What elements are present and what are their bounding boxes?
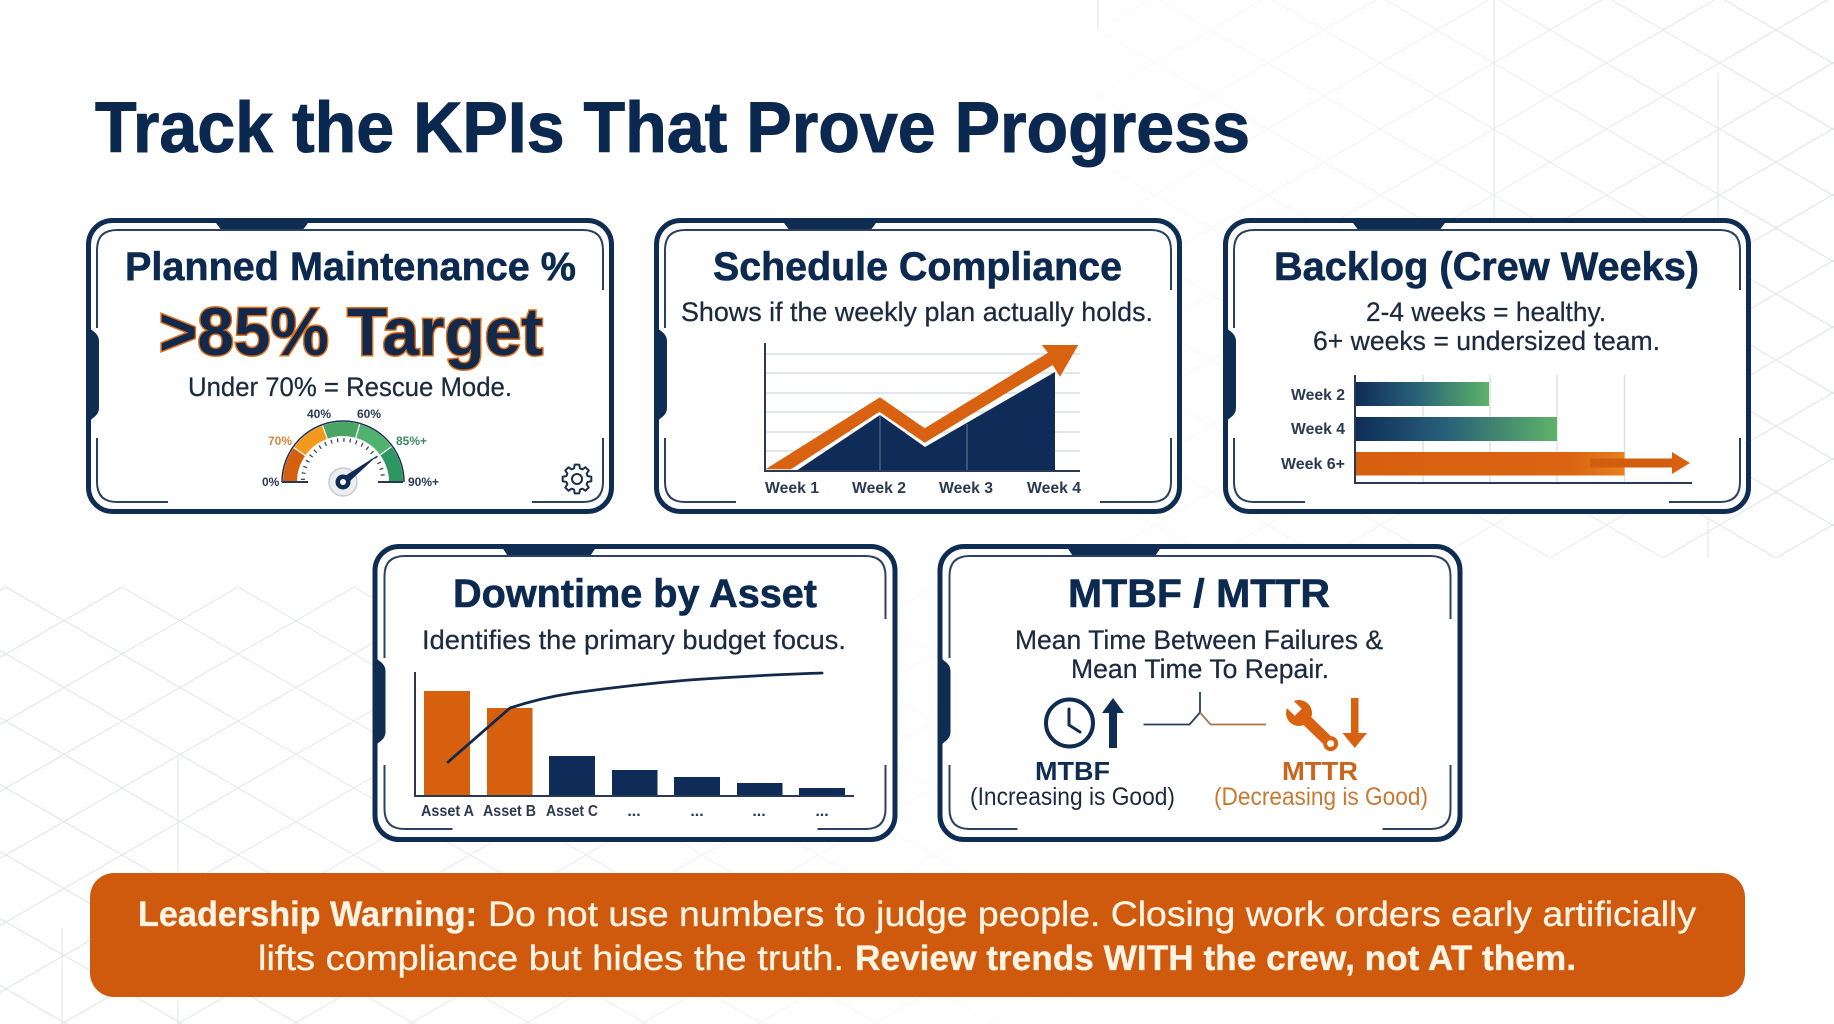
callout: leadership warning: Review trends WITH the crew, not AT them. (855, 939, 1576, 978)
callout: leadership warning: lifts compliance but hides the truth. (258, 939, 844, 978)
connector (1144, 692, 1266, 724)
card frame (374, 545, 895, 840)
gauge (262, 407, 439, 496)
card frame (655, 219, 1180, 512)
panel: backlog (1224, 219, 1748, 512)
cumulative line (448, 673, 822, 762)
gauge: 60% (357, 407, 381, 421)
bar chart (1281, 375, 1692, 483)
description (1313, 297, 1660, 356)
bar chart: Week 4 (1291, 421, 1345, 438)
description: Shows if the weekly plan actually holds. (681, 297, 1153, 327)
description: Identifies the primary budget focus. (422, 625, 846, 655)
description: 2-4 weeks = healthy. (1366, 297, 1606, 327)
icon: gear (563, 465, 591, 493)
gauge: 40% (307, 407, 331, 421)
bar chart: Week 6+ (1281, 456, 1345, 473)
panel: schedule compliance (655, 219, 1180, 512)
description: Under 70% = Rescue Mode. (188, 372, 512, 402)
description (1015, 625, 1383, 684)
description: 6+ weeks = undersized team. (1313, 326, 1660, 356)
callout: leadership warning: Do not use numbers to judge people. Closing work orders early artificially (488, 895, 1697, 934)
area chart: Week 3 (939, 480, 993, 497)
panel: planned maintenance (87, 219, 612, 512)
callout: leadership warning: Leadership Warning: (138, 895, 477, 934)
MTTR label: (Decreasing is Good) (1214, 783, 1428, 811)
heading: Schedule Compliance (713, 245, 1122, 289)
pareto chart: ... (627, 803, 641, 820)
heading: MTBF / MTTR (1068, 572, 1330, 616)
title: Track the KPIs That Prove Progress (95, 89, 1250, 168)
area chart: Week 4 (1027, 480, 1081, 497)
heading: Planned Maintenance % (125, 245, 576, 289)
area chart (765, 343, 1081, 497)
gauge: 85%+ (396, 434, 427, 448)
description: Mean Time To Repair. (1071, 654, 1329, 684)
gauge: 0% (262, 475, 280, 489)
heading: Backlog (Crew Weeks) (1274, 245, 1699, 289)
MTBF label: (Increasing is Good) (970, 783, 1175, 811)
icon: clock (1046, 700, 1093, 746)
MTBF label (970, 756, 1175, 811)
pareto chart: Asset C (546, 803, 598, 820)
arrow (766, 345, 1078, 469)
description: Mean Time Between Failures & (1015, 625, 1383, 655)
icon: up arrow (1102, 698, 1124, 748)
card frame (87, 219, 612, 512)
bar chart: Week 2 (1291, 387, 1345, 404)
callout: leadership warning (90, 873, 1745, 997)
big target value: >85% Target (159, 294, 543, 370)
gauge: 70% (268, 434, 292, 448)
area chart: Week 2 (852, 480, 906, 497)
pareto chart: Asset A (421, 803, 474, 820)
panel: MTBF / MTTR (938, 545, 1460, 840)
icon: wrench (1279, 693, 1345, 758)
icon: down arrow (1342, 698, 1367, 748)
card frame (1224, 219, 1748, 512)
pareto chart: ... (690, 803, 704, 820)
gauge: 90%+ (408, 475, 439, 489)
MTTR label (1214, 756, 1428, 811)
pareto chart: Asset B (483, 803, 536, 820)
pareto chart (415, 672, 854, 820)
pareto chart: ... (815, 803, 829, 820)
MTBF label: MTBF (1035, 756, 1110, 786)
pareto chart: ... (752, 803, 766, 820)
area chart: Week 1 (765, 480, 819, 497)
MTTR label: MTTR (1282, 756, 1358, 786)
heading: Downtime by Asset (453, 572, 817, 616)
card frame (938, 545, 1460, 840)
panel: downtime by asset (374, 545, 895, 840)
